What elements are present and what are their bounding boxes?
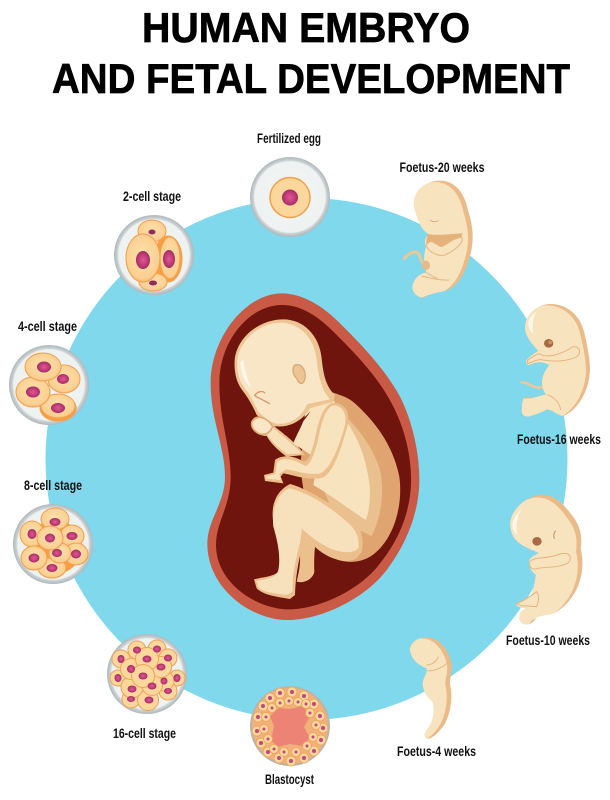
blastocyst capsule bbox=[250, 686, 330, 766]
fist at mouth bbox=[252, 417, 273, 434]
label: Foetus-20 weeks: Foetus-20 weeks bbox=[400, 159, 485, 175]
background circle bbox=[46, 198, 568, 720]
fetus torso mid tone bbox=[313, 408, 382, 536]
head outline bbox=[235, 319, 335, 426]
label: 8-cell stage: 8-cell stage bbox=[24, 477, 82, 493]
nucleus bbox=[282, 190, 298, 206]
near thigh and lower leg bbox=[254, 484, 363, 599]
title: HUMAN EMBRYO bbox=[142, 4, 470, 51]
title bbox=[52, 4, 570, 102]
arm bbox=[530, 553, 570, 569]
arm bbox=[426, 237, 462, 255]
near arm bbox=[264, 403, 348, 483]
4-cell stage capsule bbox=[9, 345, 89, 425]
eye spot bbox=[544, 339, 553, 348]
fetus belly bbox=[313, 413, 370, 520]
leg crease bbox=[547, 395, 561, 410]
outer cells bbox=[252, 687, 328, 766]
eye spot bbox=[532, 537, 542, 546]
uterus wall bbox=[207, 293, 419, 620]
cytoplasm bbox=[270, 178, 310, 218]
arm bbox=[527, 347, 580, 363]
head face bbox=[237, 323, 330, 424]
cord stump bbox=[422, 261, 430, 270]
title: AND FETAL DEVELOPMENT bbox=[52, 55, 570, 102]
forehead highlight bbox=[241, 360, 251, 388]
foetus 4 weeks bbox=[410, 637, 452, 739]
label: 4-cell stage: 4-cell stage bbox=[18, 318, 77, 334]
label: 16-cell stage: 16-cell stage bbox=[113, 725, 176, 741]
8-cell stage capsule bbox=[13, 504, 93, 584]
foetus 16 weeks bbox=[518, 304, 590, 418]
leg crease bbox=[422, 273, 449, 280]
16-cell stage capsule bbox=[107, 634, 187, 714]
closed eye bbox=[254, 392, 270, 404]
uterus cavity bbox=[216, 305, 411, 609]
label: Fertilized egg: Fertilized egg bbox=[257, 130, 321, 146]
fetus back bbox=[300, 390, 400, 562]
umbilical cord bbox=[404, 252, 424, 265]
chest and neck bbox=[293, 396, 335, 458]
ear bbox=[293, 365, 305, 383]
far leg bbox=[290, 527, 318, 582]
central fetus in uterus bbox=[207, 293, 419, 620]
fertilized egg capsule bbox=[250, 157, 330, 237]
2-cell stage capsule bbox=[114, 215, 194, 295]
label: Foetus-4 weeks: Foetus-4 weeks bbox=[397, 743, 476, 759]
neck fold bbox=[427, 657, 449, 671]
blastocyst cavity bbox=[270, 706, 310, 747]
label: 2-cell stage: 2-cell stage bbox=[123, 188, 181, 204]
far arm and hand bbox=[251, 417, 305, 457]
foetus 10 weeks bbox=[506, 495, 582, 627]
leg bbox=[517, 592, 539, 607]
body silhouette bbox=[412, 181, 473, 297]
body light area bbox=[408, 182, 468, 299]
label: Blastocyst: Blastocyst bbox=[265, 771, 314, 787]
closed eye bbox=[430, 220, 439, 222]
foetus 20 weeks bbox=[404, 181, 473, 299]
